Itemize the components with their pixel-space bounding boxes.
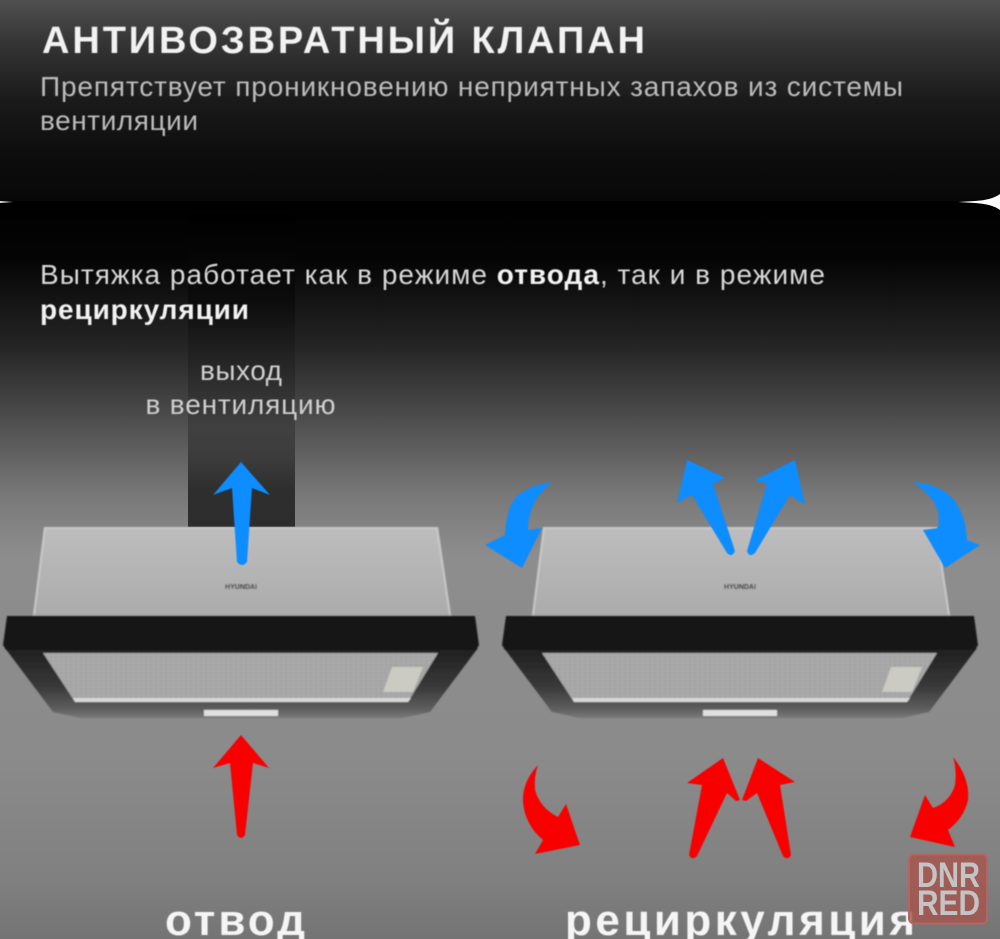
left edge sliver	[0, 201, 13, 203]
corner notch	[958, 194, 1000, 210]
mode description text: рециркуляции	[40, 294, 249, 325]
arrows: blue recirculation outflow	[485, 460, 980, 568]
duct label: в вентиляцию	[146, 389, 336, 420]
description text: вентиляции	[40, 105, 198, 136]
arrow: blue exhaust up	[213, 462, 270, 565]
panel: lower grey section	[0, 202, 1000, 939]
arrows: red recirculation intake	[523, 757, 968, 858]
watermark: RED	[917, 884, 980, 923]
arrow: red up left	[687, 758, 740, 858]
duct label	[146, 355, 336, 420]
arrow: red intake up	[213, 735, 269, 838]
arrow: blue curved right	[913, 482, 980, 568]
arrow: red curved right	[910, 757, 968, 847]
hood: exhaust mode	[3, 527, 479, 718]
hood: recirculation mode: HYUNDAI	[724, 584, 756, 591]
description text: Препятствует проникновению неприятных запахов из системы	[40, 71, 903, 102]
watermark: DNR	[917, 856, 980, 895]
watermark	[909, 854, 987, 924]
mode description text: Вытяжка работает как в режиме отвода, так и в режиме	[40, 259, 825, 290]
arrow: blue up right	[747, 460, 805, 555]
panel: top header	[0, 0, 1000, 201]
arrow: red curved left	[523, 765, 580, 854]
hood: recirculation mode	[502, 527, 978, 718]
title: АНТИВОЗВРАТНЫЙ КЛАПАН	[42, 17, 645, 62]
duct	[188, 215, 295, 527]
hood: exhaust mode: HYUNDAI	[225, 584, 257, 591]
arrow: blue curved left	[485, 482, 552, 568]
arrow: blue up left	[677, 460, 735, 555]
arrow: red up right	[742, 758, 795, 858]
description text	[40, 71, 903, 136]
duct label: выход	[200, 355, 282, 386]
mode description text	[40, 259, 825, 325]
